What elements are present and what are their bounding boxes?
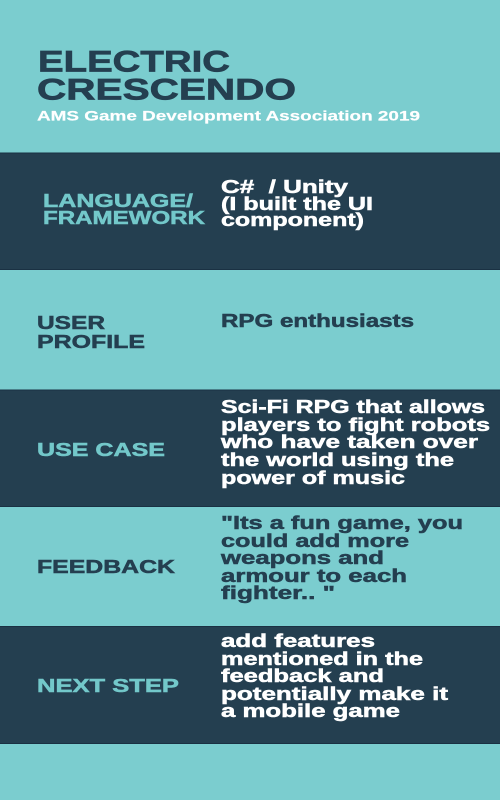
text: use case details: Sci-Fi RPG that allows [221, 397, 485, 417]
text: feedback quote: fighter.. " [221, 583, 335, 603]
label: use case: USE CASE [37, 439, 165, 460]
label: feedback: FEEDBACK [37, 556, 176, 577]
title [37, 46, 296, 106]
label: language/framework: LANGUAGE/ [43, 190, 193, 211]
text: feedback quote: "Its a fun game, you [221, 513, 463, 533]
subtitle: AMS Game Development Association 2019 [37, 108, 420, 124]
panel: feedback [37, 513, 463, 603]
band [0, 626, 500, 744]
header: title and subtitle [37, 46, 420, 124]
panel: next step [0, 626, 500, 744]
text: language details [221, 177, 373, 230]
text: next step details [221, 631, 448, 721]
text: use case details: who have taken over [220, 432, 478, 452]
text: use case details: the world using the [221, 450, 454, 470]
text: use case details: players to fight robots [221, 415, 490, 435]
text: next step details: feedback and [221, 666, 384, 686]
text: feedback quote: could add more [221, 531, 409, 551]
label: next step: NEXT STEP [37, 675, 179, 696]
text: next step details: mentioned in the [221, 649, 423, 669]
label: language/framework [43, 190, 206, 228]
label: user profile [37, 312, 145, 352]
text: language details: component) [221, 210, 364, 230]
title: ELECTRIC [38, 46, 230, 78]
text: feedback quote: armour to each [221, 566, 407, 586]
text: user profile details: RPG enthusiasts [221, 311, 414, 331]
band [0, 390, 500, 507]
text: next step details: add features [221, 631, 375, 651]
text: language details: C# / Unity [221, 177, 348, 197]
text: next step details: potentially make it [221, 684, 448, 704]
panel: user profile [37, 311, 414, 352]
text: use case details: power of music [221, 468, 405, 488]
label: user profile: USER [37, 312, 105, 333]
text: language details: (I built the UI [221, 194, 373, 214]
label: user profile: PROFILE [37, 331, 145, 352]
text: feedback quote [220, 513, 463, 603]
text: use case details [220, 397, 490, 488]
text: feedback quote: weapons and [220, 548, 384, 568]
label: language/framework: FRAMEWORK [43, 207, 206, 228]
title: CRESCENDO [37, 74, 296, 106]
panel: language / framework [0, 152, 500, 270]
band [0, 152, 500, 270]
panel: use case [0, 390, 500, 507]
text: next step details: a mobile game [221, 701, 400, 721]
